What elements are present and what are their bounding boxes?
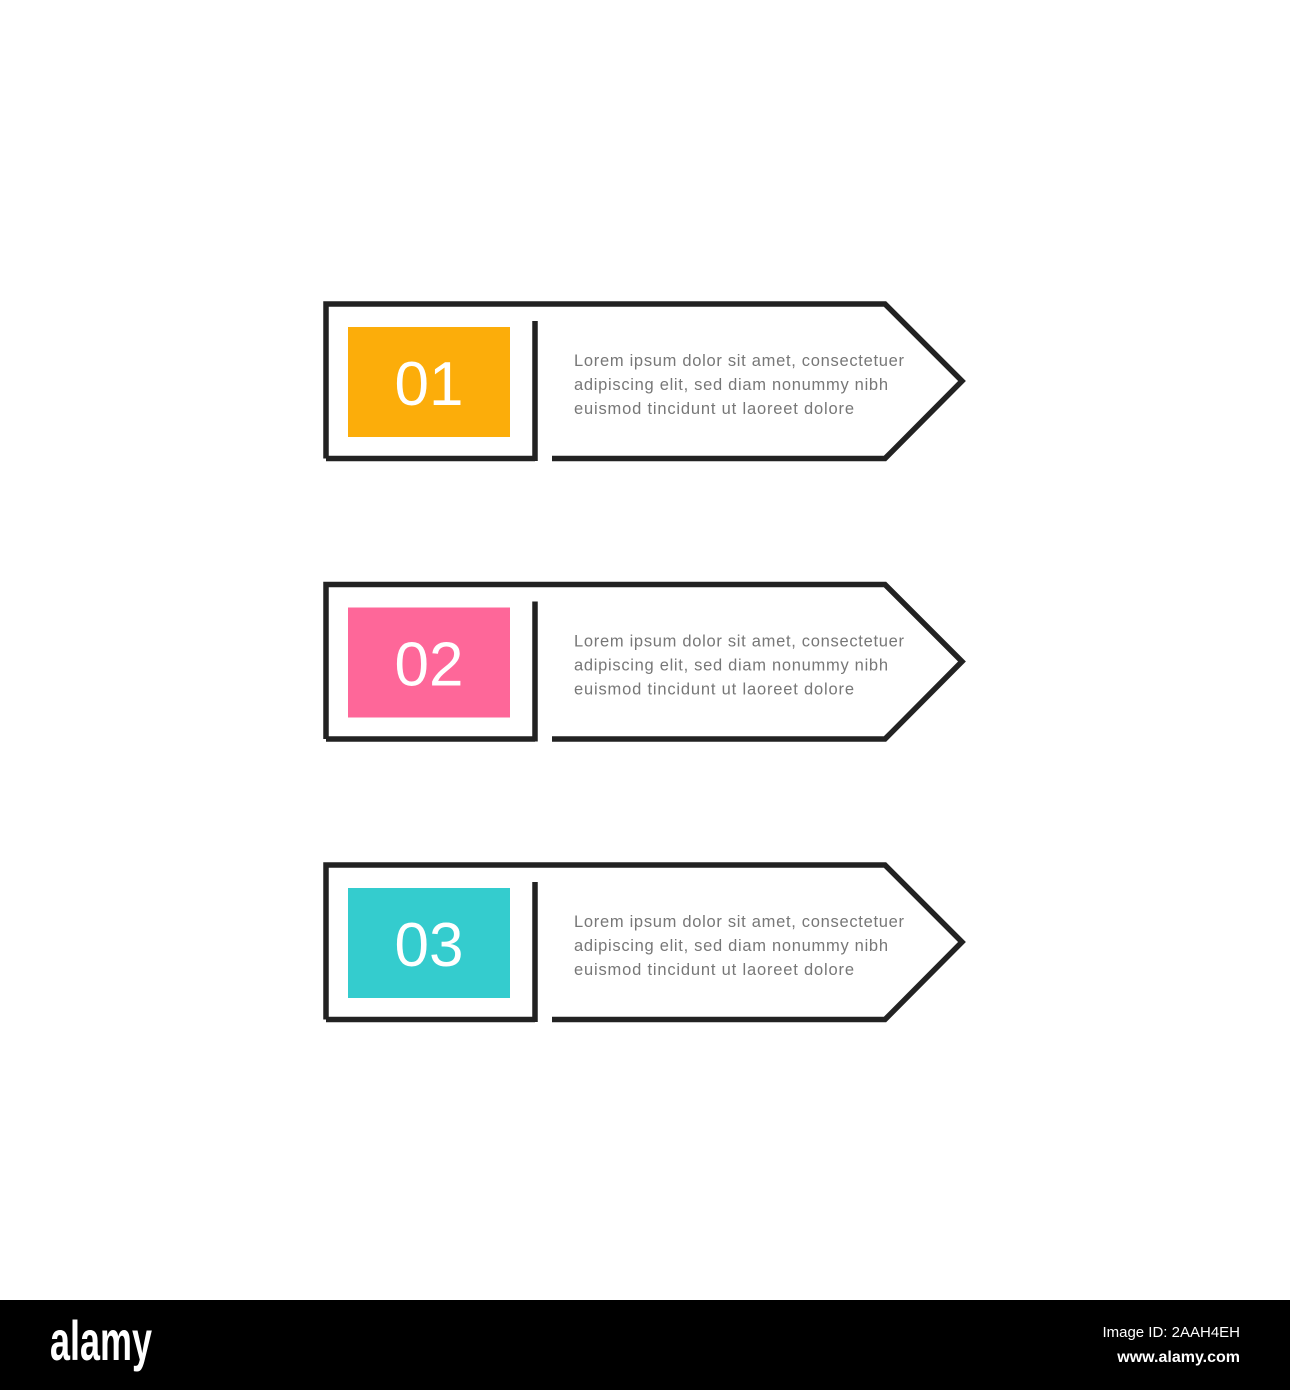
text 1 (574, 352, 904, 418)
text 3 (574, 913, 904, 979)
step 2: 02 (395, 630, 463, 700)
number box 01 (348, 327, 510, 437)
number box 03 (348, 888, 510, 998)
text 2 (574, 632, 904, 698)
image id: Image ID: 2AAH4EH (1102, 1324, 1240, 1341)
step 1: 01 (395, 350, 463, 419)
step 3: 03 (395, 911, 463, 980)
step 2 (326, 584, 962, 742)
logo: alamy (50, 1309, 152, 1372)
footer bar (0, 1300, 1290, 1390)
footer bar: www.alamy.com (1116, 1349, 1240, 1366)
number box 02 (348, 608, 510, 718)
step 1 (326, 304, 962, 461)
step 3 (326, 865, 962, 1022)
